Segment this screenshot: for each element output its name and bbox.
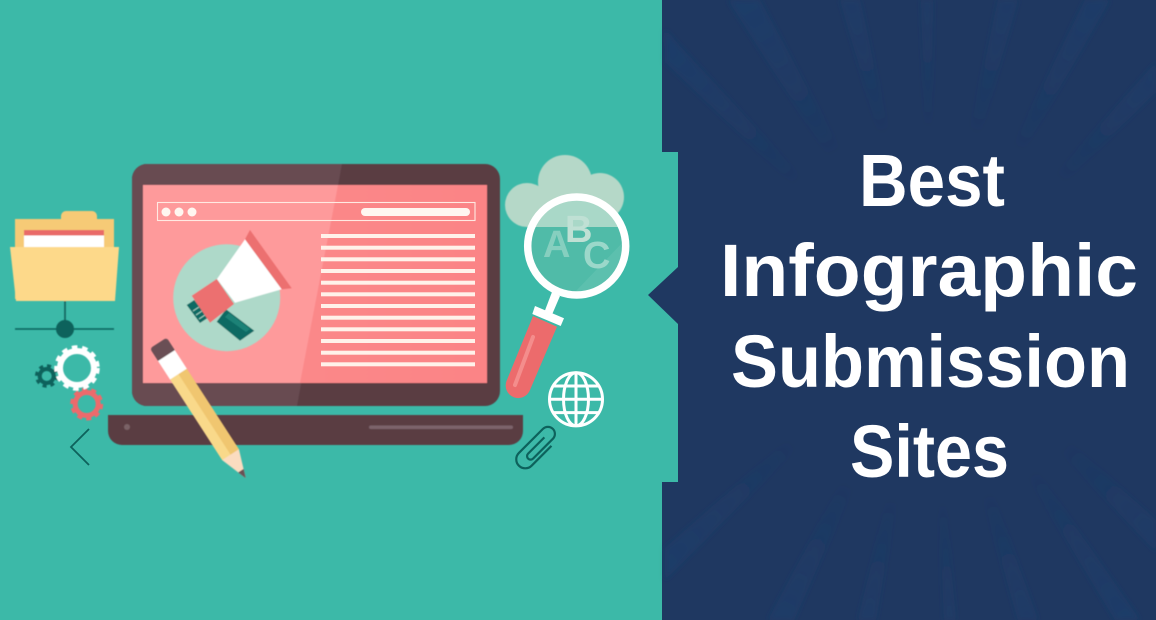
title: Best Infographic Submission Sites: Infographic xyxy=(720,229,1138,312)
lens letters xyxy=(543,209,610,277)
icon: paperclip xyxy=(513,424,561,472)
text lines on screen xyxy=(321,234,475,366)
icon: cloud xyxy=(505,155,624,227)
lens letters: B xyxy=(565,209,592,251)
icon: pencil xyxy=(150,338,254,484)
title: Best Infographic Submission Sites: Best xyxy=(859,139,1005,222)
lens letters: C xyxy=(583,235,610,277)
icon: magnifying glass with ABC xyxy=(506,195,630,398)
icon: megaphone in circle xyxy=(173,230,292,351)
lens letters: A xyxy=(543,224,570,266)
title: Best Infographic Submission Sites xyxy=(720,139,1138,493)
icon: left chevron xyxy=(71,429,89,465)
title: Best Infographic Submission Sites: Sites xyxy=(850,410,1009,493)
browser address bar xyxy=(158,202,475,220)
panel: navy title panel with notch arrow xyxy=(648,0,1156,620)
icon: globe xyxy=(550,373,602,426)
icon: folder with network node xyxy=(10,211,119,338)
title: Best Infographic Submission Sites: Submission xyxy=(731,320,1130,403)
laptop xyxy=(108,164,523,445)
icon: gears xyxy=(37,348,101,418)
